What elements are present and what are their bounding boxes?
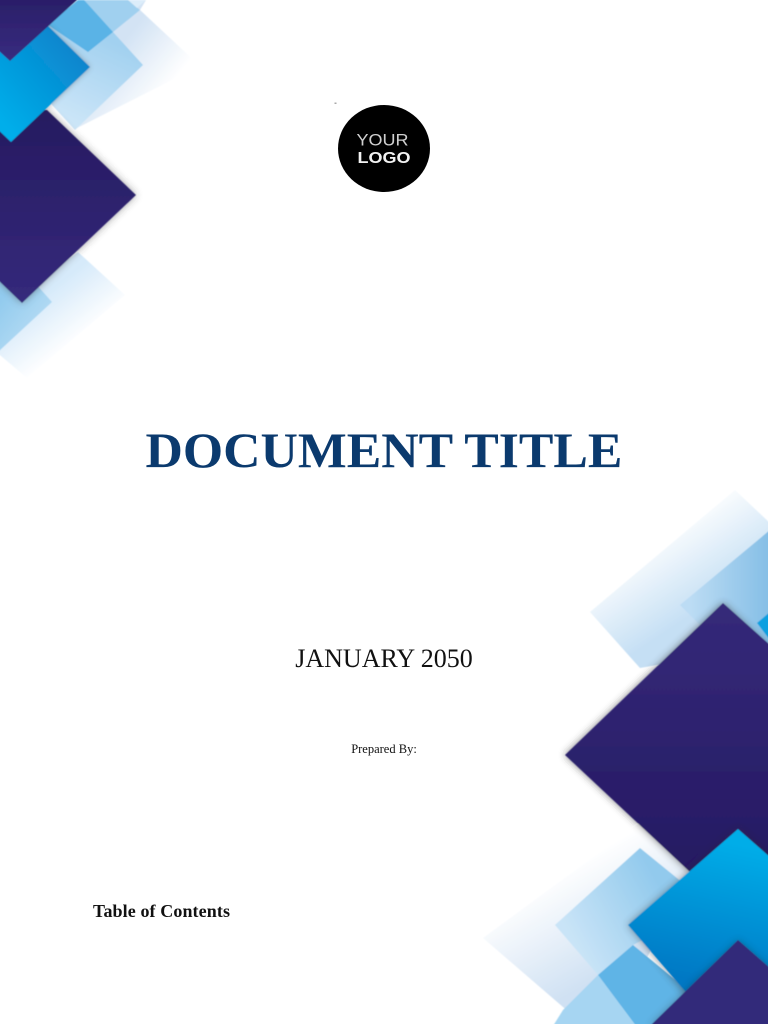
date: JANUARY 2050	[295, 644, 473, 673]
speck near logo	[334, 102, 336, 104]
title: DOCUMENT TITLE	[146, 422, 622, 478]
decoration: bottom-right diamonds	[483, 490, 768, 1024]
decoration: top-left diamonds	[0, 0, 200, 378]
prepared by: Prepared By:	[351, 742, 417, 756]
logo	[338, 105, 430, 192]
logo: YOUR	[356, 130, 408, 150]
table of contents heading: Table of Contents	[93, 901, 230, 921]
logo: LOGO	[358, 150, 410, 167]
